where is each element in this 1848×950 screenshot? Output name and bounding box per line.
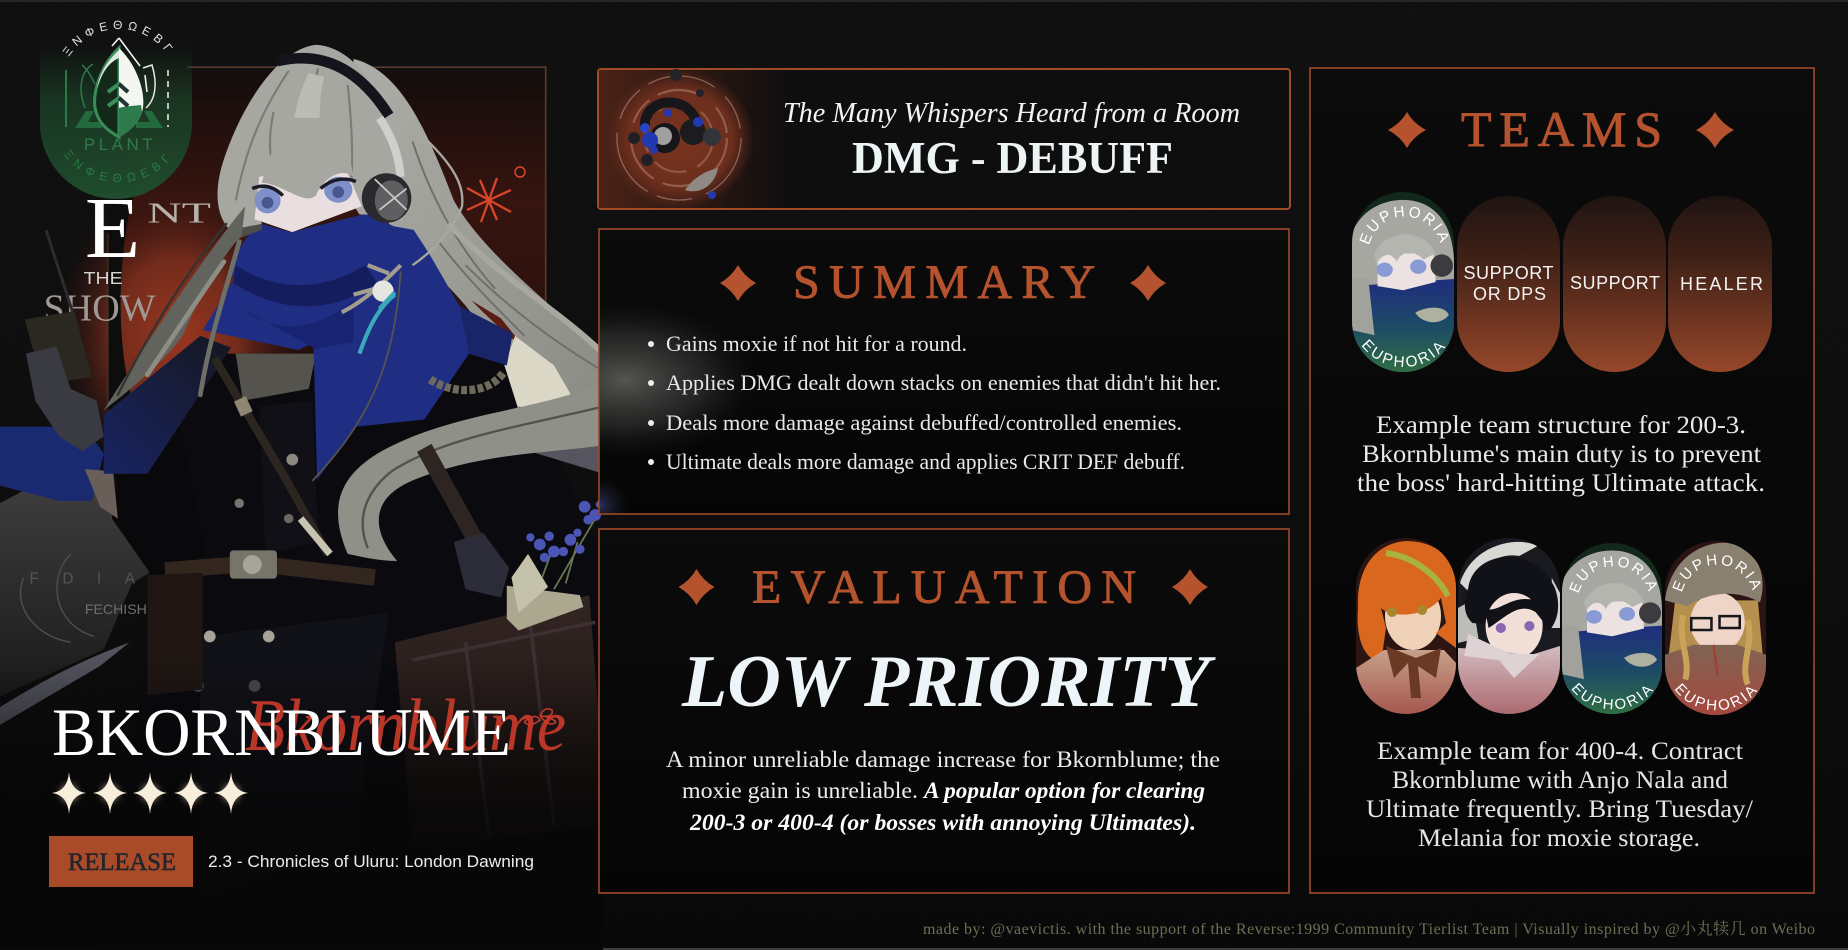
team 2 portrait: Bkornblume: [1562, 543, 1662, 714]
team 1 portrait: Bkornblume: [1352, 192, 1454, 372]
evaluation text: 200-3 or 400-4 (or bosses with annoying Ultimates).: [689, 810, 1196, 836]
evaluation text: A popular option for clearing: [922, 778, 1205, 804]
right thin hair strands: [312, 118, 603, 481]
team 2 description: Ultimate frequently. Bring Tuesday/: [1366, 796, 1753, 823]
badge emblem: leaf: [66, 38, 168, 137]
euphoria arcs: [1359, 206, 1449, 367]
panel: teams: [1309, 67, 1815, 894]
orange asterisk decoration: [467, 167, 525, 222]
euphoria arcs: EUPHORIA: [1569, 556, 1657, 593]
euphoria arcs: EUPHORIA: [1572, 682, 1654, 710]
team 2 portrait: Anjo Nala: [1665, 541, 1766, 716]
rating: LOW PRIORITY: [681, 641, 1216, 723]
left hair locks: [104, 206, 245, 410]
team 1 slot: support or dps: SUPPORT: [1464, 263, 1554, 283]
blue cuff left: [0, 427, 104, 501]
team 2 description: Melania for moxie storage.: [1418, 825, 1700, 852]
euphoria arcs: EUPHORIA: [1674, 683, 1758, 710]
scarf: [104, 213, 513, 480]
teams heading: TEAMS: [1461, 101, 1662, 157]
poster lettering: NT: [147, 199, 211, 230]
poster lettering: E: [85, 179, 140, 276]
brooch: [342, 265, 401, 354]
coat: [85, 336, 598, 742]
panel: summary: [598, 228, 1290, 515]
summary bullets: [648, 331, 1221, 474]
euphoria arcs: [1569, 556, 1657, 710]
release tag: [49, 836, 193, 887]
belt: [147, 519, 375, 695]
euphoria arcs: EUPHORIA: [1362, 339, 1446, 367]
summary bullets: Deals more damage against debuffed/controlled enemies.: [666, 410, 1182, 435]
hair behind face: [239, 221, 262, 238]
poster lettering: [46, 200, 210, 321]
shoulder strap: [214, 358, 328, 554]
badge ring text: ΞΝΦΕΘΩΕΒΓ: [64, 150, 168, 182]
team 1 slot: support or dps: OR DPS: [1473, 284, 1546, 304]
flower bouquet: [507, 500, 604, 631]
release tag: RELEASE: [68, 849, 176, 876]
poster backdrop: [66, 66, 546, 442]
back hair mass: [354, 59, 603, 407]
panel: psychube header: [598, 69, 1290, 209]
footer credit: made by: @vaevictis. with the support of the Reverse:1999 Community Tierlist Team | Visually inspired by @小丸犊几 on Weibo: [923, 920, 1815, 938]
badge label: PLANT: [84, 135, 156, 154]
team 1 slot: support or dps: [1457, 196, 1560, 372]
bottom dark fade: [0, 660, 603, 950]
teams heading: [1388, 101, 1734, 157]
evaluation heading: EVALUATION: [752, 561, 1136, 614]
team 1 description: the boss' hard-hitting Ultimate attack.: [1357, 470, 1765, 497]
team 1 slot: healer: [1668, 196, 1772, 372]
face: [252, 118, 362, 232]
grey translucent cape: FDIA: [29, 570, 159, 587]
evaluation text: moxie gain is unreliable.: [682, 778, 918, 804]
badge ring text: ΞΝΦΕΘΩΕΒΓ: [62, 20, 173, 56]
hair crown and bangs: [218, 44, 374, 228]
panel: evaluation: [599, 529, 1289, 893]
team 2 portrait: Tuesday: [1356, 538, 1456, 714]
evaluation text: A minor unreliable damage increase for Bkornblume; the: [666, 747, 1220, 773]
psychube name: The Many Whispers Heard from a Room: [783, 97, 1240, 129]
team 2 description: Example team for 400-4. Contract: [1377, 738, 1743, 765]
team 1 slot: support: SUPPORT: [1570, 273, 1660, 293]
headband and headphones: [277, 58, 411, 223]
summary bullets: Applies DMG dealt down stacks on enemies that didn't hit her.: [666, 370, 1221, 395]
team 1 description: Example team structure for 200-3.: [1376, 412, 1746, 439]
euphoria arcs: EUPHORIA: [1359, 206, 1449, 244]
release version text: 2.3 - Chronicles of Uluru: London Dawning: [208, 853, 534, 871]
walkie-talkie and glove: [25, 230, 104, 451]
psychube role: DMG - DEBUFF: [852, 133, 1173, 183]
team 2 portrait: Melania: [1458, 538, 1560, 714]
summary heading: SUMMARY: [793, 256, 1095, 309]
gloved hand: [454, 533, 509, 598]
team 2 description: [1366, 738, 1753, 852]
evaluation text: [666, 747, 1220, 836]
blurred hair wisp: [600, 316, 735, 513]
summary bullets: Gains moxie if not hit for a round.: [666, 331, 967, 356]
poster lettering: THE: [84, 268, 123, 288]
summary bullets: Ultimate deals more damage and applies CRIT DEF debuff.: [666, 449, 1185, 474]
panel: character art: [0, 45, 607, 950]
poster lettering: SHOW: [44, 288, 156, 330]
grey translucent cape: FECHISH: [85, 601, 147, 617]
lower hair sweep: [338, 383, 603, 561]
team 1 description: Bkornblume's main duty is to prevent: [1362, 441, 1761, 468]
team 1 slot: support: [1563, 196, 1666, 372]
psychube icon: [599, 69, 789, 209]
summary heading: [720, 256, 1166, 309]
element badge: plant: [40, 20, 192, 199]
badge ring text: [62, 20, 173, 182]
signature: Bkornblume script: Bkornblume: [245, 685, 566, 767]
bag and strap: [395, 448, 607, 849]
team 2 description: Bkornblume with Anjo Nala and: [1392, 767, 1729, 794]
rarity stars: [52, 772, 248, 814]
euphoria arcs: EUPHORIA: [1672, 554, 1761, 592]
team 1 slot: healer: HEALER: [1680, 274, 1763, 294]
rope: [430, 371, 504, 390]
character name: BKORNBLUME: [52, 694, 511, 770]
grey translucent cape: [0, 492, 150, 725]
team 1 description: [1357, 412, 1765, 497]
euphoria arcs: [1672, 554, 1761, 710]
